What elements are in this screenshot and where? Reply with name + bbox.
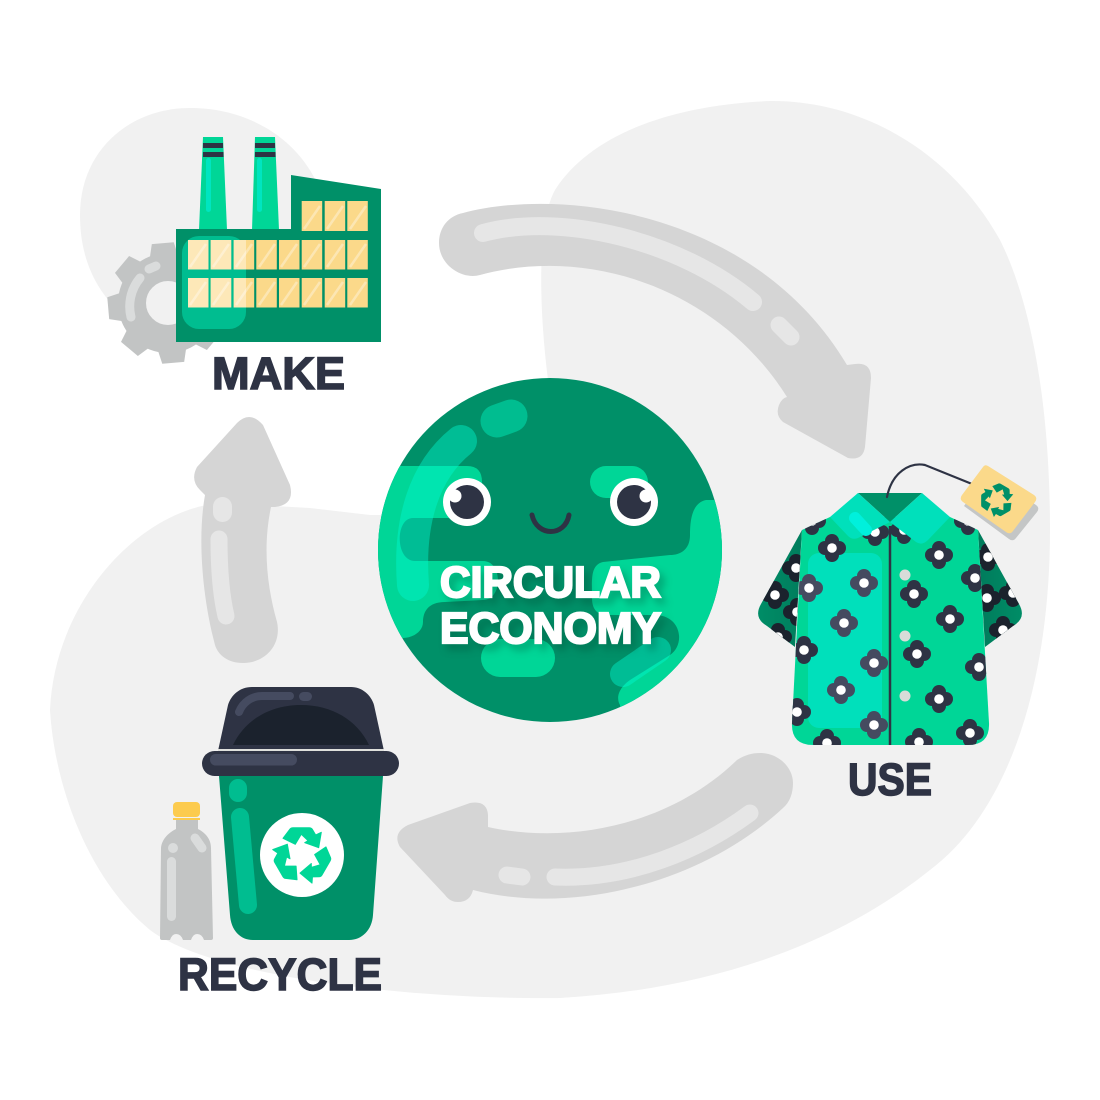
factory building <box>176 175 381 342</box>
background blob: top left <box>80 108 320 345</box>
heading: MAKE: MAKE <box>212 348 345 399</box>
land: left <box>370 466 498 645</box>
tag <box>961 465 1038 540</box>
bin rim <box>202 751 399 776</box>
icon: recycle symbol <box>269 828 335 885</box>
tag string <box>887 464 977 497</box>
heading: USE: USE <box>848 754 932 805</box>
smile <box>532 515 569 532</box>
heading: RECYCLE: RECYCLE <box>178 949 382 1000</box>
icon: gear <box>107 242 229 364</box>
buttons <box>900 570 910 702</box>
title: ECONOMY <box>440 604 661 653</box>
sleeve left <box>758 530 802 647</box>
collar <box>830 493 950 544</box>
land: right <box>592 500 722 707</box>
bin highlights <box>229 779 247 802</box>
icon: tag recycle <box>971 477 1022 525</box>
window glints <box>190 206 366 305</box>
icon: bottle <box>160 802 213 940</box>
building highlight <box>182 236 246 329</box>
bin lid <box>218 687 384 751</box>
title <box>440 558 661 653</box>
icon: factory <box>176 137 381 342</box>
shirt body <box>792 517 990 745</box>
eye right <box>610 478 658 526</box>
land: bottom <box>481 639 555 677</box>
windows <box>188 201 368 308</box>
chimney left <box>199 137 227 230</box>
highlight band <box>412 441 461 585</box>
placket line <box>889 526 891 745</box>
land: upper right <box>590 466 648 498</box>
arrow: recycle to make <box>194 417 291 663</box>
globe <box>378 378 722 722</box>
chimney right <box>252 137 279 230</box>
lid seam <box>218 749 384 752</box>
highlight lower right <box>623 650 658 674</box>
arrow: make to use <box>439 204 871 459</box>
sleeve right <box>978 530 1022 647</box>
background blob: large <box>50 101 1050 998</box>
recycle badge <box>260 813 344 897</box>
icon: recycling bin <box>202 687 399 940</box>
icon: shirt <box>750 464 1038 757</box>
title: CIRCULAR <box>440 558 661 607</box>
arrow: use to recycle <box>397 753 793 902</box>
highlight pill <box>497 416 511 421</box>
lid highlights <box>239 696 290 712</box>
eye left <box>443 478 491 526</box>
pale windows <box>188 240 246 308</box>
lid opening <box>233 705 369 745</box>
bin body <box>219 776 383 940</box>
